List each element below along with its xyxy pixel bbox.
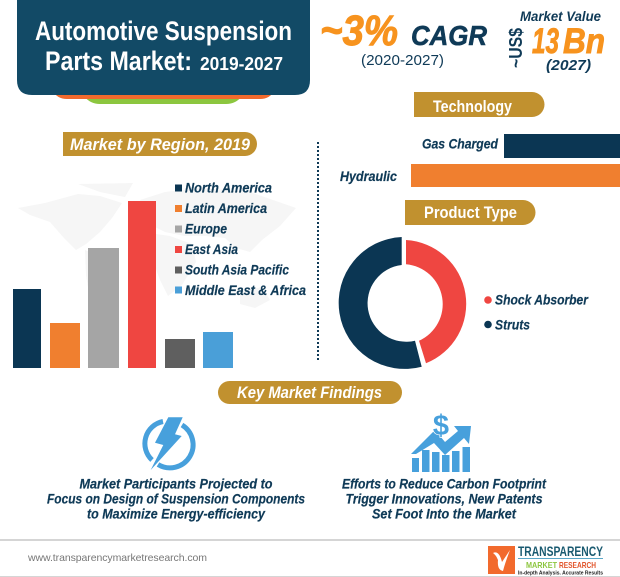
region legend bbox=[175, 180, 306, 298]
world map background bbox=[18, 183, 296, 310]
market value stat: (2027) bbox=[546, 57, 591, 74]
icon: rising chart with dollar bbox=[411, 410, 471, 472]
market value stat: ~US$ bbox=[506, 28, 526, 68]
region legend: Europe bbox=[185, 222, 227, 236]
bar chart: technology: Hydraulic bbox=[340, 169, 397, 184]
market value stat: Bn bbox=[563, 22, 605, 61]
heading: Key Market Findings bbox=[218, 381, 402, 404]
CAGR stat: (2020-2027) bbox=[361, 52, 444, 69]
heading: Technology bbox=[414, 92, 544, 117]
title: Parts Market: bbox=[45, 46, 192, 76]
banner accent: green bbox=[84, 96, 242, 104]
finding 2 text: Efforts to Reduce Carbon Footprint bbox=[342, 476, 546, 492]
website url: www.transparencymarketresearch.com bbox=[27, 552, 207, 564]
heading: Technology: Technology bbox=[433, 97, 512, 116]
header banner bbox=[17, 0, 310, 104]
product type legend: Shock Absorber bbox=[495, 292, 589, 308]
heading: Product Type bbox=[405, 200, 536, 225]
heading: Key Market Findings: Key Market Findings bbox=[237, 384, 382, 402]
finding 2 bbox=[342, 410, 546, 522]
product type legend: Struts bbox=[495, 318, 530, 332]
product type legend bbox=[484, 292, 589, 332]
region legend: Latin America bbox=[185, 201, 267, 216]
CAGR stat: ~3% bbox=[320, 7, 398, 55]
finding 2 text bbox=[342, 476, 546, 522]
region legend: North America bbox=[185, 180, 272, 196]
title: Automotive Suspension bbox=[35, 16, 292, 46]
region legend: East Asia bbox=[185, 242, 238, 257]
finding 2 text: Set Foot Into the Market bbox=[372, 506, 516, 522]
CAGR stat: CAGR bbox=[411, 20, 488, 51]
heading: Market by Region: Market by Region, 2019 bbox=[70, 136, 251, 154]
region legend: South Asia Pacific bbox=[185, 262, 289, 278]
bar chart: market by region bbox=[13, 201, 233, 368]
logo: Transparency Market Research: In-depth Analysis. Accurate Results bbox=[518, 570, 603, 576]
donut chart: product type bbox=[339, 237, 466, 369]
logo: Transparency Market Research bbox=[488, 544, 603, 576]
region legend: Middle East & Africa bbox=[185, 283, 306, 298]
icon: rising chart with dollar: $ bbox=[433, 410, 449, 442]
finding 1 bbox=[47, 417, 305, 522]
banner panel bbox=[17, 0, 310, 95]
finding 2 text: Trigger Innovations, New Patents bbox=[346, 492, 543, 506]
title bbox=[35, 16, 292, 76]
market value stat: Market Value bbox=[520, 9, 601, 24]
banner accent: orange bbox=[52, 90, 275, 99]
finding 1 text bbox=[47, 476, 305, 522]
heading: Product Type: Product Type bbox=[424, 203, 517, 222]
market value stat: 13 bbox=[532, 22, 559, 61]
title: 2019-2027 bbox=[200, 54, 283, 74]
finding 1 text: to Maximize Energy-efficiency bbox=[87, 506, 266, 522]
finding 1 text: Focus on Design of Suspension Components bbox=[47, 492, 305, 506]
CAGR stat bbox=[320, 7, 488, 69]
logo: Transparency Market Research: RESEARCH bbox=[559, 560, 596, 570]
logo: Transparency Market Research: MARKET bbox=[526, 560, 558, 570]
bar chart: technology: Gas Charged bbox=[422, 136, 499, 152]
bar chart: technology bbox=[340, 134, 620, 187]
market value stat bbox=[506, 9, 605, 74]
icon: lightning bolt bbox=[145, 417, 193, 470]
icon: logo mark bbox=[488, 546, 515, 574]
finding 1 text: Market Participants Projected to bbox=[80, 476, 272, 492]
